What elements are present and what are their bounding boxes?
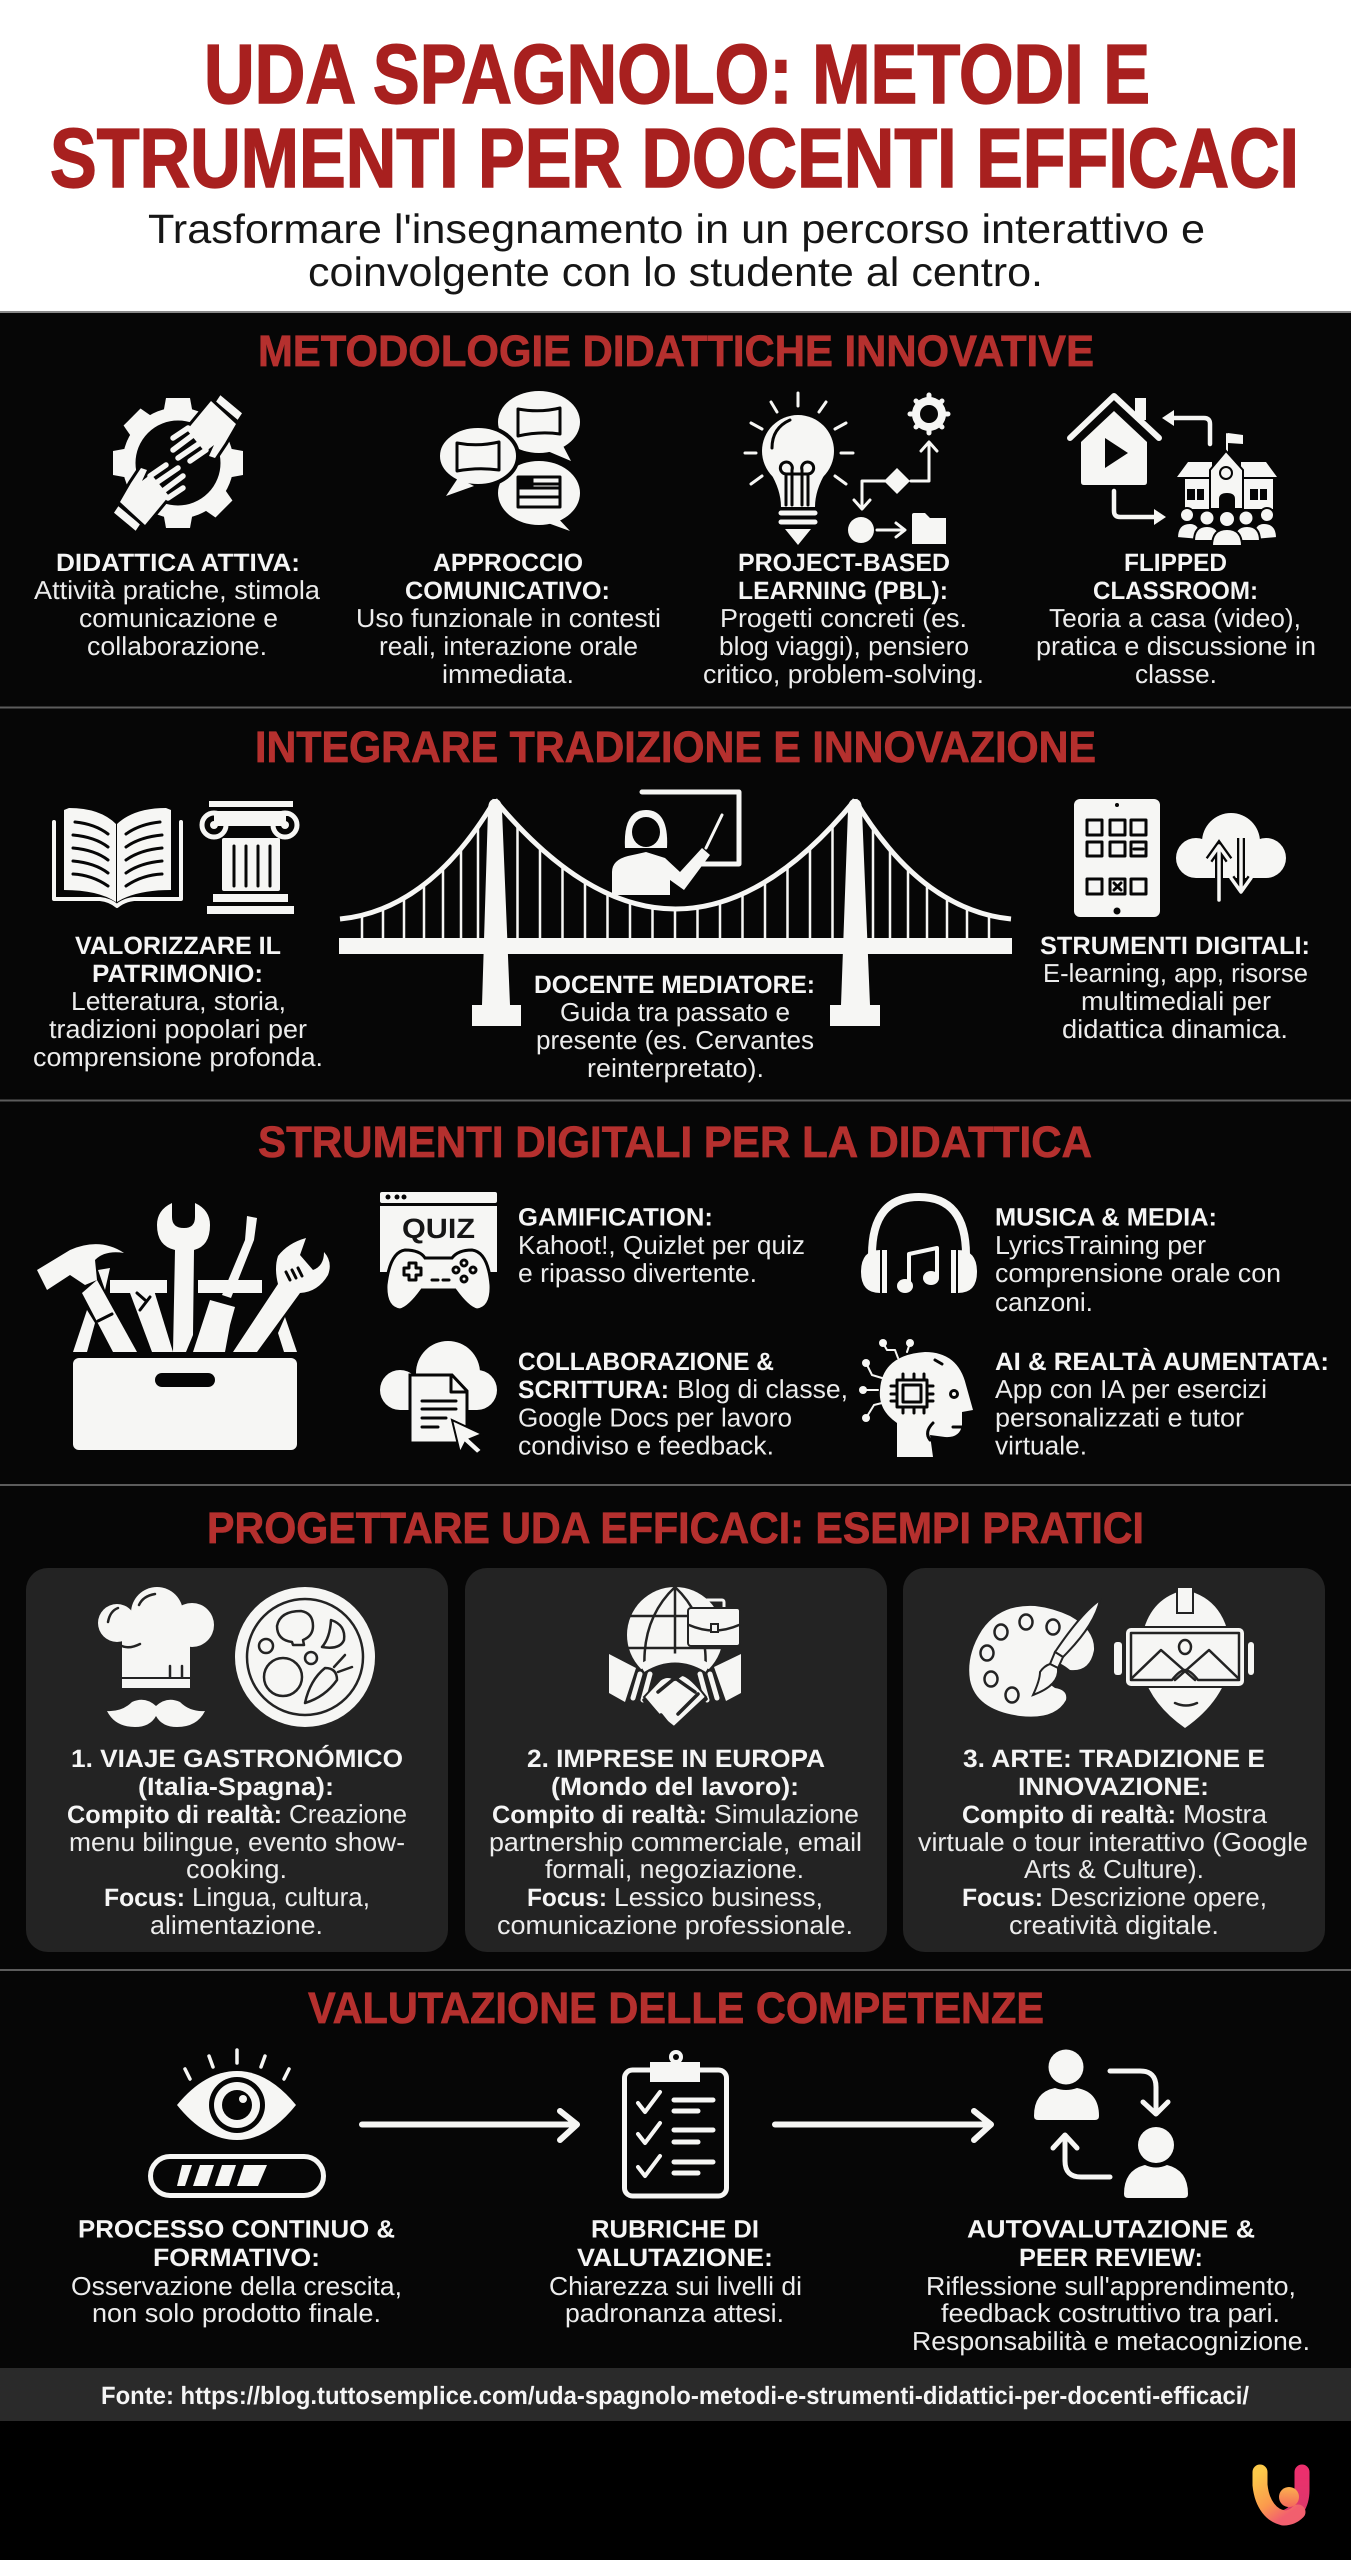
- icon: peer review people: [1034, 2050, 1188, 2198]
- text: autovalutazione e peer review: feedback costruttivo tra pari.: [941, 2298, 1280, 2328]
- card: viaje gastronomico: [26, 1568, 448, 1952]
- text: card 1: cooking.: [186, 1854, 287, 1884]
- title: UDA SPAGNOLO: METODI E: [204, 27, 1150, 121]
- text: valorizzare il patrimonio: VALORIZZARE IL: [75, 932, 281, 960]
- icon: light bulb with flowchart: [745, 393, 948, 545]
- text: gamification: e ripasso divertente.: [518, 1258, 757, 1288]
- icon: chef hat and moustache: [98, 1587, 214, 1727]
- text: AI e realta aumentata: AI & REALTÀ AUMENTATA:: [995, 1347, 1329, 1376]
- icon: toolbox: [37, 1203, 330, 1450]
- text: card 1: alimentazione.: [150, 1910, 323, 1940]
- text: strumenti digitali: E-learning, app, risorse: [1043, 958, 1308, 988]
- heading: valutazione: VALUTAZIONE DELLE COMPETENZE: [308, 1984, 1044, 2033]
- text: project-based learning: PROJECT-BASED: [738, 549, 950, 577]
- text: card 3: INNOVAZIONE:: [1018, 1773, 1209, 1801]
- text: card 3: Descrizione opere,: [1050, 1882, 1267, 1912]
- logo: [1260, 2472, 1302, 2518]
- text: processo continuo: PROCESSO CONTINUO &: [78, 2216, 395, 2244]
- text: strumenti digitali: STRUMENTI DIGITALI:: [1040, 932, 1310, 960]
- text: AI e realta aumentata: [995, 1347, 1329, 1460]
- icon: globe briefcase handshake: [609, 1587, 741, 1727]
- panel: metodologie didattiche innovative: [34, 327, 1316, 689]
- title: [50, 27, 1299, 205]
- text: valorizzare il patrimonio: comprensione profonda.: [33, 1042, 323, 1072]
- text: docente mediatore: reinterpretato).: [587, 1053, 764, 1083]
- text: project-based learning: Progetti concreti (es.: [720, 603, 967, 633]
- footer source band: Fonte: https://blog.tuttosemplice.com/uda-spagnolo-metodi-e-strumenti-didattici-per-docenti-efficaci/: [101, 2382, 1249, 2410]
- text: project-based learning: blog viaggi), pensiero: [719, 631, 969, 661]
- text: didattica attiva: comunicazione e: [79, 603, 278, 633]
- arrow: eye to clipboard: [362, 2111, 577, 2140]
- text: docente mediatore: Guida tra passato e: [560, 997, 790, 1027]
- text: approccio comunicativo: Uso funzionale in contesti: [356, 603, 661, 633]
- text: gamification: Kahoot!, Quizlet per quiz: [518, 1230, 805, 1260]
- text: flipped classroom: [1036, 549, 1316, 689]
- text: didattica attiva: DIDATTICA ATTIVA:: [56, 549, 300, 577]
- text: card 2: Compito di realtà:: [492, 1801, 707, 1829]
- text: collaborazione e scrittura: COLLABORAZIONE &: [518, 1348, 774, 1376]
- text: card 3: Compito di realtà:: [962, 1801, 1176, 1829]
- text: collaborazione e scrittura: Google Docs per lavoro: [518, 1402, 792, 1432]
- text: valorizzare il patrimonio: PATRIMONIO:: [92, 960, 263, 988]
- text: didattica attiva: [34, 549, 321, 661]
- text: strumenti digitali: multimediali per: [1081, 986, 1271, 1016]
- text: collaborazione e scrittura: condiviso e feedback.: [518, 1430, 774, 1460]
- text: autovalutazione e peer review: Riflessione sull'apprendimento,: [926, 2271, 1296, 2301]
- icon: speech bubbles: [438, 391, 580, 531]
- text: flipped classroom: pratica e discussione in: [1036, 631, 1316, 661]
- text: collaborazione e scrittura: [518, 1348, 848, 1460]
- icon: cloud transfer: [1176, 813, 1286, 900]
- text: processo continuo: FORMATIVO:: [153, 2244, 320, 2272]
- text: valorizzare il patrimonio: [33, 932, 323, 1072]
- icon: palette and brush: [969, 1600, 1100, 1717]
- text: strumenti digitali: didattica dinamica.: [1062, 1014, 1288, 1044]
- text: card 1: [67, 1744, 407, 1940]
- text: AI e realta aumentata: personalizzati e tutor: [995, 1402, 1244, 1432]
- icon: cloud with document: [380, 1341, 497, 1454]
- heading: integrare: INTEGRARE TRADIZIONE E INNOVAZIONE: [255, 723, 1096, 772]
- text: card 1: 1. VIAJE GASTRONÓMICO: [71, 1744, 403, 1773]
- text: didattica attiva: collaborazione.: [87, 631, 267, 661]
- subtitle: [148, 206, 1205, 295]
- icon: gear with hands: [112, 393, 244, 533]
- text: docente mediatore: presente (es. Cervantes: [536, 1025, 814, 1055]
- text: flipped classroom: Teoria a casa (video),: [1049, 603, 1301, 633]
- text: strumenti digitali: [1040, 932, 1310, 1044]
- text: autovalutazione e peer review: [912, 2216, 1310, 2356]
- icon: AI head: [859, 1339, 973, 1457]
- panel: strumenti digitali per la didattica: [37, 1118, 1329, 1460]
- text: valorizzare il patrimonio: tradizioni popolari per: [49, 1014, 307, 1044]
- panel: valutazione delle competenze: [71, 1984, 1310, 2356]
- text: rubriche di valutazione: RUBRICHE DI: [591, 2216, 759, 2244]
- text: approccio comunicativo: [356, 549, 661, 689]
- text: card 2: Focus:: [527, 1884, 607, 1912]
- text: gamification: [518, 1204, 805, 1288]
- text: flipped classroom: CLASSROOM:: [1093, 577, 1258, 605]
- text: rubriche di valutazione: Chiarezza sui livelli di: [549, 2271, 802, 2301]
- text: autovalutazione e peer review: AUTOVALUTAZIONE &: [967, 2216, 1255, 2244]
- icon: eye with progress bar: [150, 2050, 324, 2196]
- icon: suspension bridge: [339, 799, 1012, 1026]
- text: collaborazione e scrittura: SCRITTURA:: [518, 1376, 669, 1404]
- text: valorizzare il patrimonio: Letteratura, storia,: [71, 986, 286, 1016]
- text: docente mediatore: [534, 971, 815, 1083]
- text: card 2: formali, negoziazione.: [545, 1854, 804, 1884]
- text: collaborazione e scrittura: Blog di classe,: [677, 1374, 848, 1404]
- text: card 2: [489, 1745, 862, 1940]
- text: approccio comunicativo: COMUNICATIVO:: [405, 577, 610, 605]
- text: card 1: Compito di realtà:: [67, 1801, 282, 1829]
- text: card 3: creatività digitale.: [1009, 1910, 1219, 1940]
- card: imprese in europa: [465, 1568, 887, 1952]
- arrow: clipboard to people: [775, 2111, 991, 2140]
- text: project-based learning: LEARNING (PBL):: [738, 577, 948, 605]
- text: rubriche di valutazione: [549, 2216, 802, 2328]
- text: flipped classroom: classe.: [1135, 659, 1217, 689]
- text: musica e media: comprensione orale con: [995, 1258, 1281, 1288]
- text: card 3: 3. ARTE: TRADIZIONE E: [963, 1745, 1265, 1773]
- text: processo continuo: Osservazione della crescita,: [71, 2271, 402, 2301]
- text: musica e media: canzoni.: [995, 1287, 1093, 1317]
- card: arte tradizione e innovazione: [903, 1568, 1325, 1952]
- icon: greek column: [202, 801, 297, 914]
- icon: teacher at board: [612, 792, 739, 895]
- text: card 3: Focus:: [962, 1884, 1043, 1912]
- text: card 2: Simulazione: [714, 1799, 859, 1829]
- text: card 3: [918, 1745, 1308, 1940]
- text: card 3: virtuale o tour interattivo (Google: [918, 1827, 1308, 1857]
- text: autovalutazione e peer review: PEER REVIEW:: [1019, 2244, 1203, 2272]
- text: musica e media: [995, 1204, 1281, 1317]
- text: rubriche di valutazione: padronanza attesi.: [565, 2298, 784, 2328]
- icon: VR headset: [1114, 1587, 1254, 1728]
- text: card 1: Lingua, cultura,: [192, 1882, 370, 1912]
- text: musica e media: MUSICA & MEDIA:: [995, 1204, 1217, 1232]
- text: project-based learning: critico, problem-solving.: [703, 659, 984, 689]
- icon: tablet: [1074, 799, 1160, 917]
- subtitle: coinvolgente con lo studente al centro.: [308, 249, 1043, 295]
- text: docente mediatore: DOCENTE MEDIATORE:: [534, 971, 815, 999]
- text: gamification: GAMIFICATION:: [518, 1204, 713, 1232]
- footer source band: [0, 2368, 1351, 2421]
- text: card 2: comunicazione professionale.: [497, 1910, 853, 1940]
- panel: integrare tradizione e innovazione: [33, 723, 1310, 1083]
- text: processo continuo: [71, 2216, 402, 2328]
- text: card 1: (Italia-Spagna):: [138, 1773, 334, 1801]
- icon: pizza plate: [235, 1587, 375, 1727]
- text: card 3: Arts & Culture).: [1024, 1854, 1204, 1884]
- text: project-based learning: [703, 549, 984, 689]
- heading: metodologie: METODOLOGIE DIDATTICHE INNOVATIVE: [258, 327, 1094, 376]
- icon: quiz with gamepad: QUIZ: [402, 1213, 475, 1244]
- text: flipped classroom: FLIPPED: [1124, 549, 1227, 577]
- icon: quiz with gamepad: [380, 1192, 497, 1310]
- panel: progettare UDA efficaci: [26, 1504, 1325, 1952]
- heading: strumenti digitali: STRUMENTI DIGITALI PER LA DIDATTICA: [258, 1118, 1092, 1167]
- text: card 2: (Mondo del lavoro):: [551, 1773, 799, 1801]
- text: card 3: Mostra: [1183, 1799, 1268, 1829]
- text: card 2: partnership commerciale, email: [489, 1827, 862, 1857]
- subtitle: Trasformare l'insegnamento in un percorso interattivo e: [148, 206, 1205, 252]
- icon: headphones: [861, 1197, 977, 1293]
- icon: flipped classroom house and school: [1070, 396, 1277, 546]
- text: didattica attiva: Attività pratiche, stimola: [34, 575, 321, 605]
- text: card 1: Creazione: [289, 1799, 407, 1829]
- text: approccio comunicativo: immediata.: [442, 659, 574, 689]
- icon: open book: [54, 808, 181, 906]
- text: card 1: menu bilingue, evento show-: [69, 1827, 405, 1857]
- text: approccio comunicativo: APPROCCIO: [433, 549, 583, 577]
- text: musica e media: LyricsTraining per: [995, 1230, 1206, 1260]
- icon: clipboard checklist: [624, 2050, 726, 2196]
- text: rubriche di valutazione: VALUTAZIONE:: [577, 2244, 773, 2272]
- text: processo continuo: non solo prodotto finale.: [92, 2298, 381, 2328]
- text: card 1: Focus:: [104, 1884, 185, 1912]
- text: autovalutazione e peer review: Responsabilità e metacognizione.: [912, 2326, 1310, 2356]
- text: AI e realta aumentata: virtuale.: [995, 1430, 1087, 1460]
- text: card 2: Lessico business,: [614, 1882, 823, 1912]
- text: card 2: 2. IMPRESE IN EUROPA: [527, 1745, 825, 1773]
- text: AI e realta aumentata: App con IA per esercizi: [995, 1374, 1267, 1404]
- heading: progettare: PROGETTARE UDA EFFICACI: ESEMPI PRATICI: [207, 1504, 1144, 1553]
- text: approccio comunicativo: reali, interazione orale: [379, 631, 638, 661]
